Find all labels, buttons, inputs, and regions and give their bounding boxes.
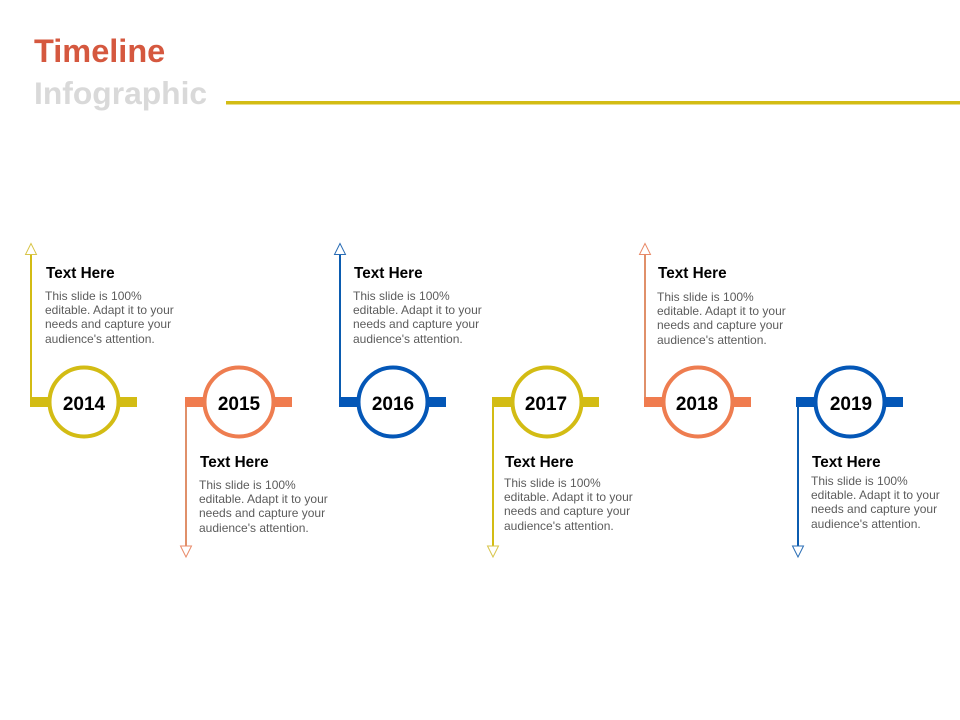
text block 2016: audience's attention. [353,332,463,346]
circle 2016 [358,368,428,436]
connector bar 2018 [644,397,751,407]
text block 2015: Text Here [200,454,269,471]
year 2017: 2017 [525,394,567,415]
text block 2018: Text Here [658,265,727,282]
text block 2019: audience's attention. [811,517,921,531]
year 2016: 2016 [372,394,414,415]
circle 2014 [50,368,118,436]
title [34,33,207,111]
connector bar 2017 [492,397,599,407]
text block 2014: This slide is 100% [45,289,142,303]
arrow: up 2014 [26,244,36,399]
milestone 2019 [792,368,940,557]
text block 2018: needs and capture your [657,318,783,332]
year 2018: 2018 [676,394,718,415]
title rule [226,101,960,104]
year 2014: 2014 [63,394,106,415]
circle 2019 [816,368,884,436]
year 2019: 2019 [830,394,872,415]
text block 2019: Text Here [812,454,881,471]
text block 2017: audience's attention. [504,519,614,533]
circle 2017 [512,368,582,436]
milestone 2014 [26,244,174,436]
text block 2019: editable. Adapt it to your [811,488,940,502]
connector bar 2015 [185,397,292,407]
text block 2018: audience's attention. [657,333,767,347]
connector bar 2019 [796,397,903,407]
text block 2018: This slide is 100% [657,290,754,304]
arrow: up 2016 [334,244,346,399]
text block 2019: This slide is 100% [811,474,908,488]
arrow: down 2015 [180,405,192,557]
text block 2017: Text Here [505,454,574,471]
text block 2018 [657,265,786,347]
text block 2017: editable. Adapt it to your [504,490,633,504]
milestone 2018 [640,244,786,436]
milestone 2016 [334,244,482,436]
text block 2018: editable. Adapt it to your [657,304,786,318]
text block 2016: Text Here [354,265,423,282]
text block 2016 [353,265,482,346]
arrow: up 2018 [640,244,650,399]
text block 2016: This slide is 100% [353,289,450,303]
text block 2016: needs and capture your [353,317,479,331]
circle 2018 [664,368,732,436]
text block 2015: editable. Adapt it to your [199,492,328,506]
year 2015: 2015 [218,394,261,415]
text block 2014: Text Here [46,265,115,282]
arrow: down 2019 [792,405,804,557]
text block 2014: editable. Adapt it to your [45,303,174,317]
text block 2015: audience's attention. [199,521,309,535]
text block 2014: audience's attention. [45,332,155,346]
arrow: down 2017 [488,405,498,557]
circle 2015 [204,368,274,436]
text block 2014: needs and capture your [45,317,171,331]
text block 2017: This slide is 100% [504,476,601,490]
connector bar 2016 [339,397,446,407]
text block 2015: needs and capture your [199,506,325,520]
text block 2017: needs and capture your [504,504,630,518]
text block 2014 [45,265,174,346]
text block 2015 [199,454,328,535]
text block 2019 [811,454,940,531]
milestone 2015 [180,368,328,557]
title: Timeline [34,33,165,69]
milestone 2017 [488,368,633,557]
connector bar 2014 [30,397,137,407]
text block 2016: editable. Adapt it to your [353,303,482,317]
text block 2015: This slide is 100% [199,478,296,492]
title: Infographic [34,75,207,111]
text block 2019: needs and capture your [811,502,937,516]
text block 2017 [504,454,633,533]
